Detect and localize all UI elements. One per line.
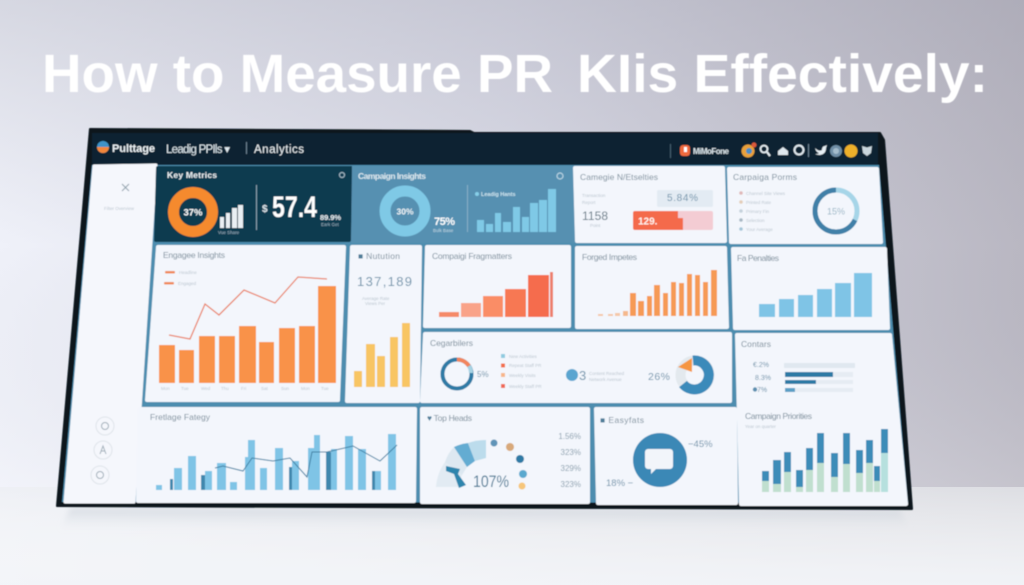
donut: 5% <box>442 360 489 388</box>
legend: Selection <box>746 218 765 223</box>
legend: Your Average <box>746 227 773 232</box>
panel: top heads: 107% <box>473 472 509 491</box>
icon: chat bubble <box>633 433 687 487</box>
panel: campaign forms: Carpaiga Porms <box>733 172 797 182</box>
top navigation bar <box>92 133 878 165</box>
stacked bar chart <box>762 429 888 492</box>
metric rows: 8.3% <box>755 375 771 382</box>
panel: headline stat <box>347 247 420 401</box>
panel: key metrics: Eark Get <box>321 222 340 227</box>
panel: sidebar <box>65 165 156 502</box>
panel: key metrics: $ <box>262 204 268 215</box>
panel: fretlage fategy: Fretlage Fategy <box>150 412 211 422</box>
title: How to Measure PR <box>42 44 553 104</box>
legend: Primary Fin <box>746 209 769 214</box>
monitor bezel <box>57 129 912 509</box>
donut: 15% <box>815 190 857 232</box>
bar chart: blue <box>156 434 396 490</box>
bar chart: blue <box>759 273 872 317</box>
panel: engage insights: Sun <box>281 386 290 391</box>
stat: 3: 3 <box>579 368 586 383</box>
panel: cegarbilers: 26% <box>648 371 670 383</box>
panel: engage insights: Engaged <box>178 281 197 286</box>
panel: campaign fragmatters: Compaigi Fragmatters <box>432 251 512 261</box>
donut: 37%: 37% <box>183 208 203 218</box>
panel: campaign insights: Campaign Insights <box>358 171 426 181</box>
panel: key metrics: Key Metrics <box>167 170 217 180</box>
panel: key metrics <box>156 168 351 240</box>
bar chart: orange <box>159 286 336 383</box>
icon: orange brand mark <box>680 145 690 156</box>
top navigation bar: MiMoFone <box>693 147 730 156</box>
panel: forged impetes <box>577 248 727 327</box>
metric rows: €.2% <box>753 362 769 369</box>
values: 329% <box>561 464 581 473</box>
legend <box>739 191 786 232</box>
panel: top heads: ♥ Top Heads <box>427 413 472 423</box>
panel: easyfats: 18% − <box>606 478 634 489</box>
top navigation bar: Leadig PPIls ▾ <box>166 144 230 156</box>
panel: campaign insights: Leadig Hants <box>481 192 516 198</box>
red progress bar: 129. <box>638 216 658 228</box>
gauge <box>436 440 486 488</box>
donut: 5%: 5% <box>477 370 489 379</box>
panel: engage insights: Sat <box>261 386 269 391</box>
legend: Printed Rate <box>746 200 772 205</box>
panel: campaign n/etselties: 1158 <box>582 209 608 223</box>
values: 323% <box>561 448 581 457</box>
panel: contars and campaign profiles: Contars <box>741 339 771 349</box>
stat: 3: Content Reached <box>589 371 625 376</box>
icon: brand logo <box>97 141 109 153</box>
panel: fa penalties: Fa Penalties <box>737 253 779 263</box>
panel: engage insights <box>147 247 344 400</box>
panel: engage insights: Wed <box>201 386 211 391</box>
panel: campaign insights: 75% <box>434 216 455 228</box>
line chart <box>169 277 327 339</box>
legend: New Activities <box>509 354 538 359</box>
values: 1.56% <box>558 432 581 441</box>
donut: 37% <box>174 192 212 232</box>
panel: forged impetes: Forged Impetes <box>582 252 637 262</box>
bar chart: orange narrow <box>598 270 717 316</box>
panel: cegarbilers: Cegarbilers <box>430 338 473 348</box>
panel: fa penalties <box>733 249 888 328</box>
donut: 15%: 15% <box>827 206 845 216</box>
panel: engage insights: Fri <box>241 386 246 391</box>
panel: campaign n/etselties: Camegie N/Etselties <box>580 172 658 182</box>
panel: campaign n/etselties: 5.84% <box>667 193 698 204</box>
donut: 30%: 30% <box>396 206 414 216</box>
panel: easyfats: −45% <box>688 439 713 450</box>
bar chart: yellow <box>354 323 410 387</box>
metric rows: 7% <box>757 387 767 394</box>
panel: headline stat: Views Per <box>365 301 386 306</box>
signal bars <box>220 205 243 228</box>
values: 323% <box>561 480 581 489</box>
panel: engage insights: Thu <box>221 386 229 391</box>
metric rows <box>753 362 855 394</box>
panel: key metrics: 89.9% <box>320 213 341 222</box>
top navigation bar: Pulttage <box>112 143 155 155</box>
title <box>42 44 988 104</box>
legend: Weekly Visits <box>509 373 536 378</box>
panel: contars and campaign profiles: Year on quarter <box>745 424 776 429</box>
panel: campaign fragmatters <box>425 247 569 326</box>
legend: Weekly Staff PR <box>509 384 542 389</box>
panel: engage insights: Engagee Insights <box>163 250 225 260</box>
title: KIis Effectively: <box>577 44 988 104</box>
panel: campaign n/etselties: Transaction <box>582 193 606 198</box>
panel: campaign n/etselties: Report <box>582 200 596 205</box>
panel: campaign forms <box>729 169 881 242</box>
line chart <box>215 445 397 477</box>
panel: engage insights: Tue <box>181 386 189 391</box>
panel: campaign insights: Bulk Base <box>433 228 454 233</box>
donut: 26% <box>678 358 710 390</box>
red progress bar <box>633 211 713 230</box>
panel: contars and campaign profiles <box>737 335 906 504</box>
panel: engage insights: Tue <box>321 386 329 391</box>
panel: campaign n/etselties: Point <box>590 223 601 228</box>
values <box>558 432 581 489</box>
panel: engage insights: Mon <box>301 386 310 391</box>
icon: close <box>122 184 129 191</box>
panel: easyfats: ■ Easyfats <box>600 415 644 425</box>
icons: sidebar circles <box>91 417 114 484</box>
panel: engage insights: Mon <box>161 386 170 391</box>
panel: campaign n/etselties <box>575 168 725 241</box>
legend: Channel Site Views <box>746 191 786 196</box>
screen background <box>62 164 908 503</box>
panel: key metrics: Vue Share <box>218 230 240 235</box>
icons: toolbar <box>742 142 872 158</box>
panel: sidebar: Filter Overview <box>104 206 135 211</box>
panel: headline stat: ■ Nutution <box>358 251 400 261</box>
donut: 30% <box>385 191 425 231</box>
legend <box>501 354 542 389</box>
stat: 3 <box>566 368 625 383</box>
panel: headline stat: 137,189 <box>357 274 412 289</box>
top navigation bar: Analytics <box>254 144 304 156</box>
panel: contars and campaign profiles: Campaign Priorities <box>745 411 812 421</box>
legend: Repeat Staff PR <box>509 363 542 368</box>
small icons <box>490 440 527 490</box>
panel: engage insights: Headline <box>179 270 197 275</box>
bar chart: insights <box>477 189 556 232</box>
panel: headline stat: Average Rate <box>362 296 390 301</box>
monitor <box>57 129 912 509</box>
bar chart: red <box>439 272 553 317</box>
panel: easyfats <box>596 409 736 503</box>
panel: cegarbilers <box>422 334 730 401</box>
panel: fretlage fategy <box>138 409 415 501</box>
big metric: 57.4 <box>272 191 317 224</box>
panel: top heads <box>422 409 588 502</box>
panel: campaign insights <box>351 166 575 243</box>
stat: 3: Network Avenue <box>589 377 622 382</box>
